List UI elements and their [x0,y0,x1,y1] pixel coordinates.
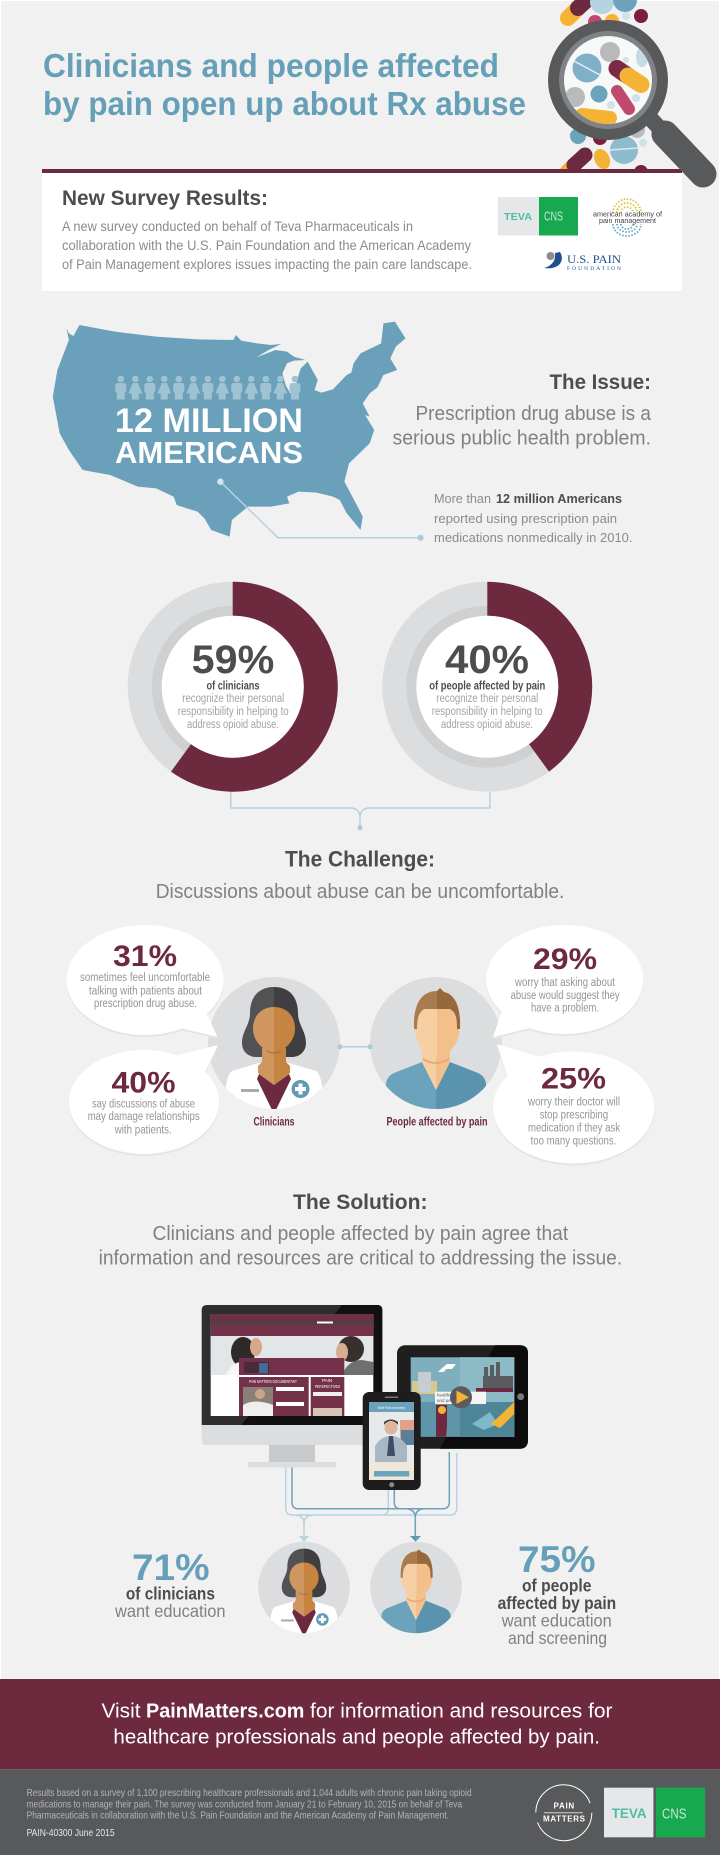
section: the solution: The Solution: [293,1191,428,1214]
section: the challenge: The Challenge: [285,847,435,872]
statistic: 71 percent of clinicians: of clinicians [126,1583,215,1603]
logo: Teva CNS footer: CNS [662,1805,686,1822]
statistic: 75 percent of people affected by pain: affected by pain [498,1593,616,1613]
survey heading: New Survey Results: [62,187,268,210]
callout bubble: 31 percent: prescription drug abuse. [94,998,197,1010]
survey description: collaboration with the U.S. Pain Foundation and the American Academy [62,238,471,253]
callout bubble: 29 percent: worry that asking about [514,977,616,989]
logo: Pain Matters: PAIN [554,1801,574,1810]
donut label: clinicians: recognize their personal [182,693,284,705]
footnote text: Pharmaceuticals in collaboration with the U.S. Pain Foundation and the American Academy of Pain Management. [27,1810,449,1822]
footnote text: medications to manage their pain. The survey was conducted from January 21 to February 10, 2015 on behalf of Teva [27,1798,462,1810]
section: the issue [392,371,652,450]
section: the solution: information and resources are critical to addressing the issue. [99,1247,622,1270]
logo: American Academy of Pain Management: american academy of [593,210,663,218]
callout bubble: 29 percent [486,925,643,1039]
callout bubble: 29 percent: 29% [533,943,597,976]
section: the challenge [156,847,564,903]
logo: Teva CNS [498,197,578,236]
donut label: clinicians: address opioid abuse. [187,719,279,731]
survey description: A new survey conducted on behalf of Teva Pharmaceuticals in [62,219,413,234]
label: clinicians: Clinicians [254,1117,294,1129]
tablet screen: healthcare [437,1393,459,1398]
logo: Pain Matters: MATTERS [543,1815,586,1824]
logo: Teva CNS: CNS [544,208,563,224]
statistic: 71 percent of clinicians: want education [114,1601,226,1621]
tablet screen: and people [437,1398,460,1403]
connector between avatars [338,1044,372,1049]
callout bubble: 25 percent: worry their doctor will [527,1097,620,1109]
logo: American Academy of Pain Management: pain management [599,216,657,225]
logo: American Academy of Pain Management [593,199,663,236]
statistic: 75 percent of people affected by pain: 75% [518,1539,596,1580]
statistic: 75 percent of people affected by pain: want education [501,1611,612,1631]
footnote text: PAIN-40300 June 2015 [27,1827,115,1839]
connector lines from devices to people [286,1452,457,1542]
callout bubble: 40 percent: may damage relationships [88,1111,200,1123]
person affected by pain avatar small [370,1542,462,1636]
statistic: 12 million Americans text: More than [434,491,491,506]
phone screen: Brief Pain Inventory [378,1405,405,1410]
monitor screen: website: PAIN MATTERS DOCUMENTARY [249,1379,297,1384]
callout bubble: 40 percent: 40% [112,1067,176,1100]
donut label: people affected by pain: 40% [445,638,529,682]
icon: magnifying glass with pills [548,20,703,174]
callout bubble: 31 percent: 31% [113,940,177,973]
label: people affected by pain: People affected by pain [386,1117,488,1129]
logo: Teva CNS footer [604,1788,705,1837]
statistic: 75 percent of people affected by pain: of people [522,1576,592,1596]
section: the challenge: Discussions about abuse can be uncomfortable. [156,880,564,903]
section: the issue: serious public health problem. [392,427,651,450]
callout bubble: 25 percent [493,1044,654,1166]
statistic: 12 million Americans text: reported using prescription pain [434,511,617,526]
tablet screen [411,1357,514,1437]
callout bubble: 29 percent: abuse would suggest they [511,990,620,1002]
callout bubble: 40 percent: say discussions of abuse [92,1098,195,1110]
callout bubble: 25 percent: 25% [541,1063,606,1096]
banner: visit PainMatters.com: Visit [102,1700,141,1723]
title: by pain open up about Rx abuse [43,85,526,122]
logo: Teva CNS: TEVA [504,211,532,223]
donut label: people affected by pain: recognize their personal [436,693,538,705]
logo: Pain Matters [536,1785,592,1841]
monitor screen: website [211,1314,373,1416]
donut label: people affected by pain: responsibility in helping to [432,706,543,718]
banner: visit PainMatters.com: PainMatters.com [146,1700,304,1723]
logo: U.S. Pain Foundation: U.S. PAIN [567,254,622,266]
banner: visit PainMatters.com: healthcare professionals and people affected by pain. [113,1725,600,1748]
callout bubble: 25 percent: medication if they ask [528,1122,620,1134]
section: the issue: The Issue: [550,371,651,394]
donut label: people affected by pain: of people affected by pain [429,680,545,692]
device: desktop monitor [202,1305,382,1468]
callout bubble: 40 percent: with patients. [114,1124,172,1136]
pills illustration behind magnifier [567,0,648,179]
banner: visit PainMatters.com: for information and resources for [310,1700,613,1723]
statistic: 71 percent of clinicians: 71% [132,1547,210,1588]
title: Clinicians and people affected [43,47,499,84]
callout bubble: 40 percent [69,1045,219,1156]
callout bubble: 29 percent: have a problem. [531,1003,599,1015]
statistic: 12 million Americans text: medications nonmedically in 2010. [434,530,632,545]
footer [0,1769,720,1855]
title [43,47,526,122]
monitor screen: website: PAIN [322,1378,332,1383]
donut label: clinicians: 59% [192,638,274,682]
statistic: 71 percent of clinicians [114,1547,226,1621]
clinicians avatar small with statistic icon [258,1542,350,1637]
map: United States with 12 million Americans [53,322,405,537]
statistic: 75 percent of people affected by pain [498,1539,616,1648]
bracket connecting donuts to challenge [231,792,490,830]
statistic: 75 percent of people affected by pain: and screening [508,1628,607,1648]
callout bubble: 31 percent: talking with patients about [89,985,203,997]
logo: Teva CNS footer: TEVA [612,1805,647,1821]
donut label: people affected by pain: address opioid abuse. [441,719,533,731]
logo: U.S. Pain Foundation [544,252,622,272]
callout bubble: 25 percent: stop prescribing [540,1110,608,1122]
survey description: of Pain Management explores issues impacting the pain care landscape. [62,257,472,272]
section: the solution: Clinicians and people affected by pain agree that [152,1222,568,1245]
map headline [115,402,303,470]
logo: U.S. Pain Foundation: FOUNDATION [567,266,621,272]
icon: clinician avatar [208,977,340,1129]
donut label: clinicians [178,638,289,731]
survey description [62,219,472,272]
banner: visit PainMatters.com [0,1679,720,1769]
callout line from map to statistic [217,478,424,541]
panel: new survey results [42,169,682,291]
device: tablet with video [397,1345,528,1449]
footnote text: Results based on a survey of 1,100 prescribing healthcare professionals and 1,044 adults with chronic pain taking opioid [27,1787,472,1799]
callout bubble: 31 percent [66,925,224,1039]
donut chart: 59 percent of clinicians [128,582,338,792]
icon: person affected by pain avatar [370,977,502,1129]
section: the solution [99,1191,622,1270]
statistic: 12 million Americans text [434,491,632,545]
donut chart: 40 percent of people affected by pain [382,582,592,792]
section: the issue: Prescription drug abuse is a [416,402,652,425]
statistic: 12 million Americans text: 12 million Americans [496,491,622,506]
device: smartphone [363,1392,421,1490]
icon: row of 13 people [115,376,300,400]
donut label: clinicians: responsibility in helping to [178,706,289,718]
callout bubble: 25 percent: too many questions. [531,1135,616,1147]
footnote text [27,1787,472,1839]
monitor screen: website: PERSPECTIVES [315,1384,340,1389]
donut label: people affected by pain [429,638,545,731]
donut label: clinicians: of clinicians [206,680,260,692]
map headline: AMERICANS [115,435,303,470]
callout bubble: 31 percent: sometimes feel uncomfortable [80,972,210,984]
map headline: 12 MILLION [115,402,303,440]
